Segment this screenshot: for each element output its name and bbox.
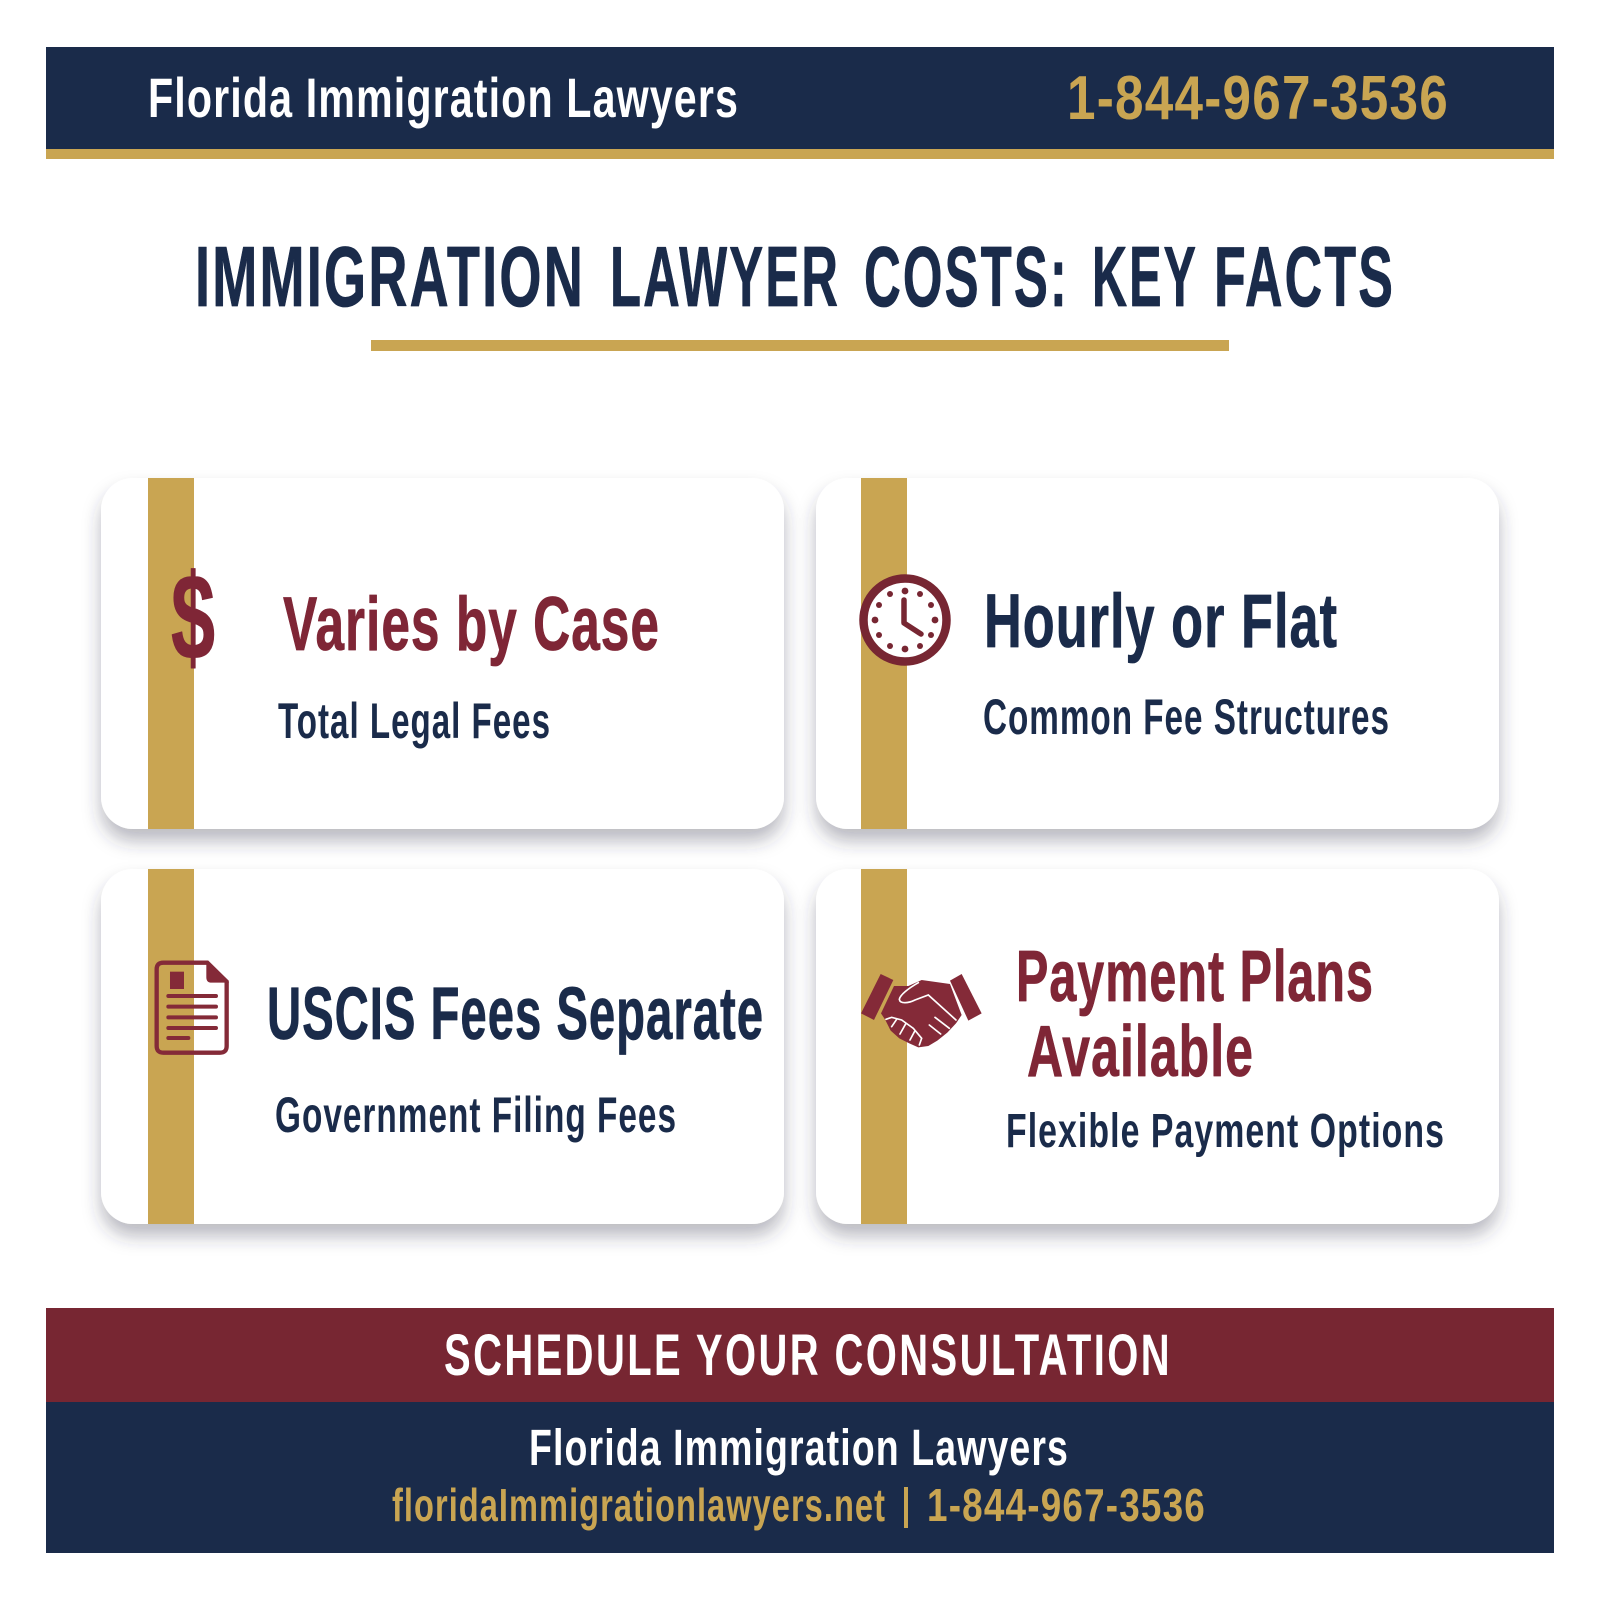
card heading: USCIS Fees Separate (267, 972, 764, 1055)
icon: handshake (861, 974, 982, 1047)
card heading line one: Payment Plans (1016, 937, 1374, 1017)
card heading line two: Available (1027, 1012, 1254, 1092)
phone number: 1-844-967-3536 (1067, 64, 1449, 133)
panel: uscis fees separate (101, 869, 784, 1224)
card subheading: Total Legal Fees (278, 693, 551, 749)
website: floridaImmigrationlawyers.net (392, 1479, 886, 1531)
panel: payment plans available (816, 869, 1499, 1224)
call to action text: SCHEDULE YOUR CONSULTATION (444, 1323, 1172, 1388)
contact band (46, 1402, 1554, 1553)
card subheading: Government Filing Fees (275, 1087, 677, 1143)
card subheading: Common Fee Structures (983, 689, 1390, 745)
title: FACTS (1214, 230, 1395, 325)
call to action band (46, 1308, 1554, 1402)
title: LAWYER (610, 230, 840, 325)
icon: dollar sign: $ (171, 549, 215, 685)
title: IMMIGRATION (195, 230, 585, 325)
title (195, 230, 1395, 325)
phone number: 1-844-967-3536 (927, 1479, 1206, 1531)
title underline (371, 340, 1229, 351)
icon: clock (864, 578, 946, 662)
title: KEY (1092, 230, 1198, 325)
panel: hourly or flat (816, 478, 1499, 829)
header banner (46, 47, 1554, 159)
card heading: Varies by Case (283, 582, 660, 667)
title: COSTS: (864, 230, 1069, 325)
firm name: Florida Immigration Lawyers (148, 66, 739, 129)
separator (904, 1487, 908, 1528)
card heading: Hourly or Flat (984, 579, 1338, 664)
icon: document (157, 963, 227, 1053)
panel: varies by case (101, 478, 784, 829)
firm name: Florida Immigration Lawyers (529, 1419, 1069, 1476)
